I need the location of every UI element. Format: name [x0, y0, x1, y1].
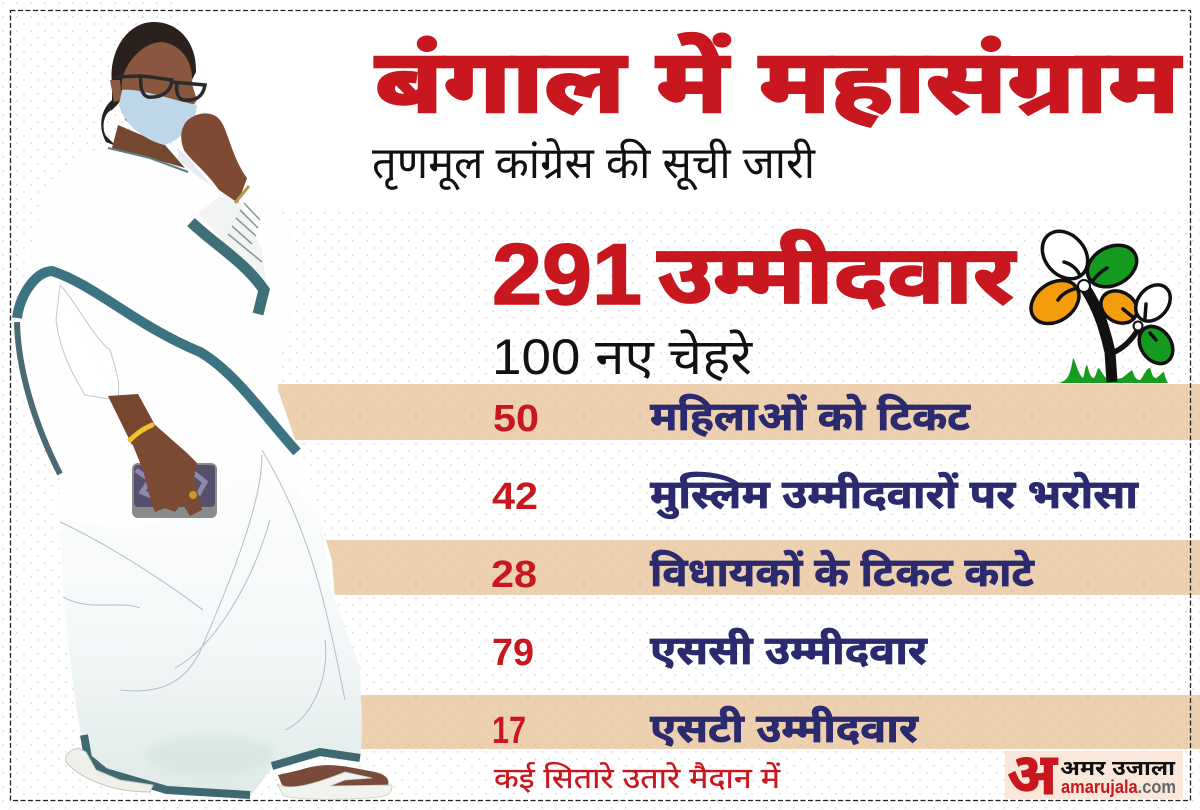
right foot and sandal [278, 765, 388, 792]
striped pallu detail [198, 185, 267, 290]
hem shading [145, 735, 275, 775]
icon: trinamool flower logo [1023, 222, 1180, 383]
stat row: ST candidates: एसटी उम्मीदवार [650, 706, 919, 751]
glasses [116, 76, 205, 100]
drape fold lines [60, 450, 345, 730]
sari body [15, 149, 362, 797]
ring [189, 491, 197, 499]
stat row: MLAs dropped [491, 550, 1036, 596]
stat row: Muslim candidates [492, 472, 1139, 519]
stat row: MLAs dropped: विधायकों के टिकट काटे [650, 550, 1036, 595]
stat row: SC candidates: एससी उम्मीदवार [650, 628, 928, 673]
sari cuff at hand [178, 148, 212, 186]
stat row: women [493, 394, 972, 440]
logo: Amar Ujala [1005, 742, 1183, 807]
skirt shading [60, 450, 362, 797]
headline: candidates: 291 [492, 227, 642, 323]
neckline edge [108, 148, 188, 172]
subheading: new faces: 100 नए चेहरे [492, 329, 754, 385]
stat row: women: महिलाओं को टिकट [650, 394, 972, 439]
headline: candidates [492, 227, 1017, 323]
ear [110, 80, 122, 102]
lower teal sari border [84, 735, 360, 795]
logo: Amar Ujala: अमर उजाला [1060, 757, 1176, 780]
teal border: chest [191, 222, 264, 314]
stat row: Muslim candidates: 42 [492, 476, 538, 518]
stat row: ST candidates: 17 [492, 710, 526, 752]
headline: candidates: उम्मीदवार [657, 230, 1017, 321]
yellow wristband [130, 425, 152, 440]
stat row: SC candidates: 79 [492, 632, 534, 674]
bun and hair [101, 22, 196, 146]
logo: Amar Ujala: amarujala.com [1061, 777, 1176, 797]
phone [132, 463, 217, 518]
teal border: left hanging edge [17, 322, 60, 474]
subtitle: तृणमूल कांग्रेस की सूची जारी [372, 137, 817, 191]
panel: stat bands [270, 384, 1200, 749]
stat row: SC candidates [492, 628, 928, 674]
left foot and sandal [66, 748, 153, 792]
logo: Amar Ujala: अ [1007, 742, 1059, 807]
stat row: ST candidates [492, 706, 919, 752]
raised hand [181, 113, 247, 203]
title: बंगाल में महासंग्राम [375, 32, 1182, 131]
neck [112, 125, 185, 168]
footer note: कई सितारे उतारे मैदान में [494, 762, 781, 795]
bangle [235, 186, 249, 203]
stat row: women: 50 [493, 398, 539, 440]
forearm [108, 394, 155, 445]
hand on phone [132, 423, 202, 516]
teal border: shoulder to waist [17, 271, 297, 452]
sleeve outline [56, 285, 119, 400]
stat row: MLAs dropped: 28 [491, 554, 537, 596]
face [122, 42, 197, 145]
photo: woman in white sari [15, 22, 392, 799]
mask [119, 90, 197, 145]
stat row: Muslim candidates: मुस्लिम उम्मीदवारों पर भरोसा [650, 472, 1139, 519]
